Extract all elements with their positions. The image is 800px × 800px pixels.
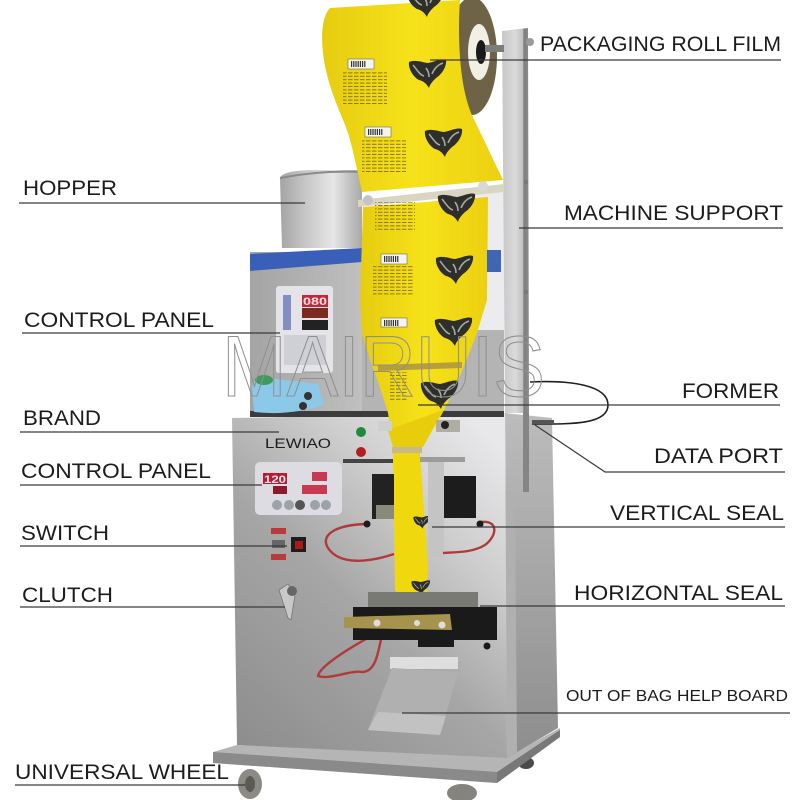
label: data port: DATA PORT xyxy=(654,445,783,468)
upper dosing box xyxy=(250,190,504,417)
printed text blocks xyxy=(343,70,415,402)
horizontal bar and heater block xyxy=(343,457,476,557)
indicator lamps xyxy=(356,427,366,457)
barcode bars xyxy=(351,64,399,323)
universal wheels xyxy=(238,757,534,800)
label: control panel upper: CONTROL PANEL xyxy=(24,309,214,332)
hopper xyxy=(280,170,362,248)
printed barcodes xyxy=(348,59,407,327)
machine base plate xyxy=(213,728,560,783)
label: universal wheel: UNIVERSAL WHEEL xyxy=(15,761,229,784)
label: horizontal seal: HORIZONTAL SEAL xyxy=(574,582,783,605)
white area beside film xyxy=(470,190,504,330)
label: packaging roll film: PACKAGING ROLL FILM xyxy=(540,33,781,56)
lower control panel xyxy=(255,462,342,515)
power switch xyxy=(271,528,306,560)
packaging film xyxy=(322,0,504,605)
film tape band xyxy=(378,362,462,371)
sticker on upper box xyxy=(252,375,324,413)
red cables xyxy=(318,522,494,677)
former collar xyxy=(378,420,460,432)
label: switch: SWITCH xyxy=(21,522,109,545)
label: former: FORMER xyxy=(682,380,779,403)
data port plug xyxy=(532,420,554,424)
label: out of bag help board: OUT OF BAG HELP BOARD xyxy=(566,688,788,705)
lower control panel: 120 xyxy=(264,474,286,486)
lower cabinet front xyxy=(232,413,507,758)
label: control panel lower: CONTROL PANEL xyxy=(21,460,211,483)
data port cable xyxy=(530,382,608,424)
film roll disc xyxy=(447,0,504,115)
film roller bar xyxy=(358,184,504,207)
label: clutch: CLUTCH xyxy=(22,584,113,607)
brand text: LEWIAO xyxy=(265,435,331,451)
label: vertical seal: VERTICAL SEAL xyxy=(610,502,784,525)
blue clamp xyxy=(487,250,501,272)
watermark: MAIRUIS xyxy=(222,319,545,415)
upper control panel: 080 xyxy=(303,296,327,308)
horizontal seal jaw xyxy=(344,592,497,650)
machine illustration xyxy=(213,0,608,800)
cable connectors xyxy=(364,520,484,528)
out of bag help board xyxy=(368,657,458,735)
upper control panel xyxy=(276,286,333,373)
label: hopper: HOPPER xyxy=(23,177,117,200)
printed insect logos xyxy=(407,0,475,595)
label: machine support: MACHINE SUPPORT xyxy=(564,202,783,225)
clutch handle xyxy=(279,584,297,620)
label: brand: BRAND xyxy=(23,407,101,430)
label: data port xyxy=(535,425,785,472)
lower cabinet side xyxy=(505,413,558,758)
machine support post xyxy=(502,28,534,492)
